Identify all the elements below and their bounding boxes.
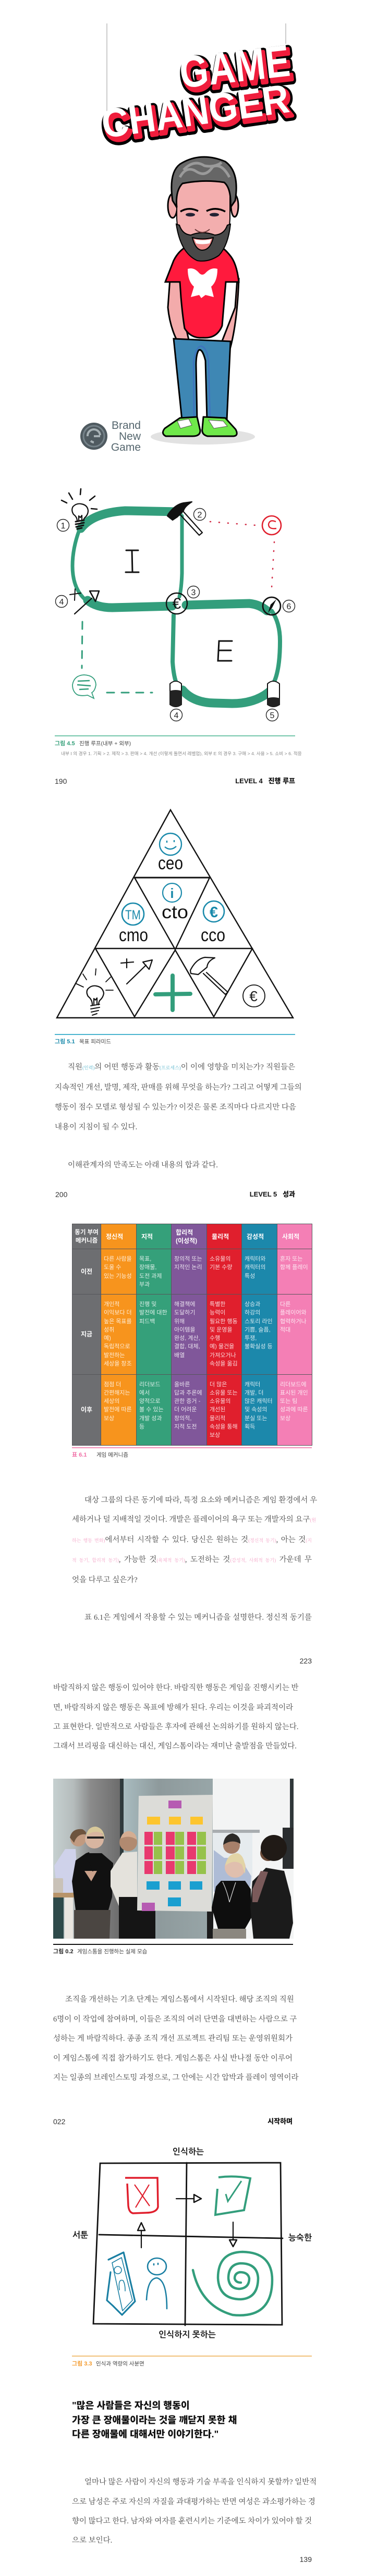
face <box>177 180 230 260</box>
table row: after: 세상의 <box>104 1398 119 1404</box>
table row: after: 관한 증거 - <box>174 1398 200 1404</box>
logo: brand new game <box>80 420 141 453</box>
table row: now: 다른 <box>280 1301 290 1308</box>
green spiral <box>193 2252 272 2315</box>
cmo block <box>119 903 148 945</box>
paragraph: undesired behaviour: 바람직하지 않은 행동이 있어야 한다. 바람직한 행동은 게임을 진행시키는 반 <box>53 1684 298 1692</box>
step numbers: 6 <box>287 602 291 611</box>
blue figure and mirror <box>107 2252 167 2315</box>
character illustration <box>151 156 255 445</box>
page number 190: 190 <box>55 777 67 785</box>
pull quote <box>72 2400 237 2439</box>
caption: table 6.1: 표 6.1 <box>72 1452 87 1458</box>
table header row: 지적 <box>141 1233 153 1240</box>
table row: now: 예) <box>104 1335 111 1341</box>
icon: logo sphere <box>80 423 107 450</box>
table row: before: 혼자 또는 <box>280 1256 303 1262</box>
table row: now: 협력하거나 <box>280 1318 307 1325</box>
icon: euro coin <box>166 593 187 614</box>
icon: green plus <box>155 976 190 1010</box>
woman with dark curly hair <box>250 1835 293 1939</box>
table row: before <box>72 1249 312 1294</box>
purple bottom note <box>142 1903 155 1911</box>
paragraph: gamestorm <box>53 1995 298 2082</box>
table row: after: 보상 <box>104 1415 114 1422</box>
page number 139: 139 <box>300 2555 312 2563</box>
caption note: 내부 I 의 경우 1. 기획 > 2. 제작 > 3. 판매 > 4. 개선 (이렇게 돌면서 레벨업), 외부 E 의 경우 3. 구매 > 4. 사용 > 5. 소비 > 6. 적응 <box>61 751 302 756</box>
table row: now: 높은 목표를 <box>104 1318 132 1325</box>
caption: figure 4.5: 진행 루프(내부 + 외부) <box>79 741 131 747</box>
table row: after: 등 <box>139 1424 144 1430</box>
poster board <box>137 1795 213 1912</box>
table row: before: 장애물, <box>139 1264 156 1271</box>
table row: after: 볼 수 있는 <box>139 1407 164 1413</box>
table row: after: 또는 팀 <box>280 1398 297 1404</box>
table row: now: 필요한 행동 <box>210 1318 238 1325</box>
table row: after: 양적으로 <box>139 1398 160 1404</box>
green checkbox with tick <box>215 2176 250 2215</box>
caption rule <box>53 1944 293 1945</box>
table row: after: 분실 또는 <box>245 1415 267 1422</box>
caption: figure 3.3 <box>72 2361 144 2367</box>
cto block <box>162 883 188 922</box>
paragraph: gamestorm: 성하는 게 바람직하다. 종종 조직 개선 프로젝트 관리팀 또는 운영위원회가 <box>53 2035 293 2043</box>
table row: now: 위해 <box>174 1318 185 1325</box>
cco block: cco <box>201 925 225 945</box>
table row: before: 도전 과제 <box>139 1273 162 1279</box>
icon: light bulb <box>62 489 97 529</box>
table row: now: 특별한 <box>210 1301 225 1308</box>
cto block: cto <box>162 902 188 922</box>
label: clumsy: 서툰 <box>72 2232 88 2239</box>
table row: before: 있는 기능성 <box>104 1273 132 1279</box>
icon: hammer <box>190 957 228 994</box>
paragraph: stakeholders: 이해관계자의 만족도는 아래 내용의 합과 같다. <box>68 1161 218 1169</box>
table row: after: 및 속성의 <box>245 1407 267 1413</box>
step numbers: 4 <box>59 598 64 607</box>
icon: compass <box>263 597 281 615</box>
paragraph: how many people <box>72 2478 317 2545</box>
label: unaware: 인식하지 못하는 <box>159 2331 216 2339</box>
cco block: € <box>210 904 218 921</box>
bald man in white shirt <box>111 1831 155 1939</box>
caption: figure 4.5 <box>55 740 131 747</box>
table row: now: 기쁨, 슬픔, <box>245 1327 271 1333</box>
caption: figure 4.5: 그림 4.5 <box>55 741 75 747</box>
paragraph: target groups: 적 동기, 합리적 동기), 가능한 것(육체적 동기), 도전하는 것(감성적, 사회적 동기) 가운데 무 <box>72 1556 312 1564</box>
paragraph: how many people: 으로 보인다. <box>72 2536 112 2545</box>
table row: now: 아이템을 <box>174 1327 195 1333</box>
table row: after: 보상 <box>280 1415 290 1422</box>
step numbers: 4 <box>174 711 179 720</box>
logo wordmark: Brand <box>112 420 141 432</box>
pink notes <box>144 1832 196 1874</box>
paragraph: undesired behaviour <box>53 1683 298 1751</box>
table row: now: 플레이어와 <box>280 1310 307 1316</box>
table row: now: 발전에 대한 <box>139 1310 167 1316</box>
pull quote: 가장 큰 장애물이라는 것을 깨닫지 못한 채 <box>72 2414 237 2425</box>
table row: now: 예) 물건을 <box>210 1344 234 1350</box>
arms <box>168 279 239 349</box>
table row: now: 독립적으로 <box>104 1344 130 1350</box>
paragraph: employees: 행동이 점수 모델로 형성될 수 있는가? 이것은 물론 조직마다 다르지만 다음 <box>55 1103 296 1112</box>
table row: now: 가져오거나 <box>210 1352 236 1359</box>
table row: after: 발전에 따른 <box>104 1407 132 1413</box>
table row: after: 개발 성과 <box>139 1415 162 1422</box>
eyes, brows and nose <box>180 209 225 232</box>
grid <box>93 2163 283 2325</box>
paragraph: target groups: 대상 그룹의 다른 동기에 따라, 특정 요소와 메커니즘은 게임 환경에서 우 <box>84 1496 317 1505</box>
diagram: awareness and competence quadrant <box>93 2162 284 2326</box>
table row: after: 많은 캐릭터 <box>245 1398 273 1404</box>
table row: before: 특성 <box>245 1273 255 1279</box>
logo wordmark <box>111 420 141 453</box>
table row: after: 창의적, <box>174 1415 191 1422</box>
paragraph: employees <box>55 1063 302 1131</box>
table row: now: 스토리 라인 <box>245 1318 273 1325</box>
dashed link green <box>82 622 152 693</box>
table row: after: 캐릭터 <box>245 1381 260 1387</box>
table row: now: 능력이 <box>210 1310 225 1316</box>
beard and mouth <box>176 224 230 261</box>
table row: before: 함께 플레이 <box>280 1264 308 1271</box>
pyramid outline <box>57 810 293 1018</box>
t-shirt <box>165 246 239 338</box>
caption: figure 3.3: 그림 3.3 <box>72 2361 92 2367</box>
caption rule <box>55 1034 295 1035</box>
table row: now: 해결책에 <box>174 1301 195 1308</box>
ceo block <box>158 833 183 873</box>
icon: speech bubble <box>72 675 96 698</box>
logotype: CHANGER <box>101 79 295 151</box>
paragraph: target groups <box>72 1496 317 1584</box>
table header row: 사회적 <box>282 1233 299 1240</box>
man at the flipchart <box>207 1833 251 1939</box>
caption: figure 5.1 <box>55 1038 111 1045</box>
table row: after: 개선된 <box>210 1407 225 1413</box>
table row: after: 리더보드에 <box>280 1381 307 1387</box>
curtains and window <box>53 1779 294 1939</box>
table row: now: 완성, 계산, <box>174 1335 200 1341</box>
paragraph: how many people: 얼마나 많은 사람이 자신의 행동과 기술 부족을 인식하지 못할까? 일반적 <box>84 2478 317 2486</box>
table row: after: 소유물 또는 <box>210 1390 238 1396</box>
arrow: right <box>176 2195 201 2202</box>
table header row: 메커니즘 <box>76 1237 98 1243</box>
yellow notes <box>147 1817 203 1825</box>
table row: after: 리더보드 <box>139 1381 160 1387</box>
letter E <box>218 641 232 661</box>
shirt logo <box>188 268 217 298</box>
table row: after: 더 많은 <box>210 1381 227 1387</box>
table header row: 물리적 <box>212 1233 229 1240</box>
table row: now: 진행 및 <box>139 1301 156 1308</box>
caption: table 6.1 <box>72 1452 128 1458</box>
table row: now: 세상을 창조 <box>104 1361 132 1367</box>
step numbers: 2 <box>198 511 202 520</box>
table header row: 감성적 <box>247 1233 264 1240</box>
icon: hammer <box>167 502 202 535</box>
caption rule <box>55 735 295 736</box>
table row: now: 적대 <box>280 1327 290 1333</box>
paragraph: target groups: 하는 행동 변화)에서부터 시작할 수 있다. 당신은 원하는 것(정신적 동기), 아는 것(지 <box>72 1536 312 1544</box>
cmo block: TM <box>125 908 141 922</box>
step numbers: 3 <box>191 588 196 597</box>
table row: before: 캐릭터와 <box>245 1256 265 1262</box>
page number 200: 200 <box>55 1190 67 1199</box>
hair <box>172 157 236 207</box>
table header row: 정신적 <box>106 1233 123 1240</box>
table row: now: 불확실성 등 <box>245 1344 273 1350</box>
ground shadow <box>151 429 255 445</box>
table header row: 합리적 <box>176 1229 193 1236</box>
caption: figure 0.2: 게임스톰을 진행하는 실제 모습 <box>77 1949 147 1955</box>
table row: before: 소유물의 <box>210 1256 230 1262</box>
table row: after: 이후 <box>81 1406 92 1413</box>
logotype <box>99 35 295 151</box>
heading: aware: 인식하는 <box>173 2148 204 2156</box>
table row: now <box>72 1295 312 1374</box>
paragraph: gamestorm: 이 게임스톰에 직접 참가하기도 한다. 게임스톰은 사실 반나절 동안 이루어 <box>53 2054 293 2063</box>
table row: after: 성과에 따른 <box>280 1407 308 1413</box>
paragraph: target groups: 엇을 다루고 싶은가? <box>72 1576 138 1584</box>
table row: now: 배열 <box>174 1352 185 1359</box>
logo wordmark: New <box>119 430 141 442</box>
table row: now: 및 운영을 <box>210 1327 233 1333</box>
paragraph: undesired behaviour: 그래서 브리핑을 대신하는 대신, 게임스톰이라는 재미난 출발점을 만들었다. <box>53 1742 297 1751</box>
table row: before: 다른 사람을 <box>104 1256 132 1262</box>
logotype: GAME <box>177 35 293 98</box>
letter I <box>126 550 139 572</box>
table row: now: 지금 <box>81 1330 92 1338</box>
table row: before: 이전 <box>81 1268 92 1275</box>
table row: now: 피드백 <box>139 1318 155 1325</box>
logotype: CHANGER <box>99 75 292 147</box>
icon: red C <box>262 516 281 535</box>
table row: now: 결합, 대체, <box>174 1344 200 1350</box>
cco block <box>201 901 225 945</box>
shoes <box>163 417 237 436</box>
blue notes <box>147 1881 202 1906</box>
icon: euro coin: € <box>173 595 181 612</box>
caption: figure 5.1: 그림 5.1 <box>55 1039 75 1045</box>
step numbers: 5 <box>270 711 275 720</box>
table row: after: 소유물의 <box>210 1398 230 1404</box>
table row: after: 에서 <box>139 1390 150 1396</box>
table row: after: 간편해지는 <box>104 1390 130 1396</box>
table row: before: 창의적 또는 <box>174 1256 202 1262</box>
photo: gamestorm session <box>53 1779 294 1939</box>
paragraph: how many people: 으로 남성은 주로 자신의 자질을 과대평가하는 반면 여성은 과소평가하는 경 <box>72 2498 315 2506</box>
paragraph: gamestorm: 6명이 이 작업에 참여하며, 이들은 조직의 여러 단면을 대변하는 사람으로 구 <box>53 2015 297 2024</box>
label: proficient: 능숙한 <box>288 2234 312 2242</box>
dotted link red <box>210 522 274 588</box>
red checkbox with cross <box>125 2178 158 2213</box>
cmo block: cmo <box>119 925 148 945</box>
table header row: (이성적) <box>176 1237 197 1244</box>
table row: now: 수행 <box>210 1335 220 1341</box>
step numbers: 1 <box>61 522 66 531</box>
table row: after: 보상 <box>210 1432 220 1438</box>
paragraph: target groups: 세하거나 덜 지배적일 것이다. 개발은 플레이어의 욕구 또는 개발자의 요구(원 <box>72 1515 316 1524</box>
table row: after: 지적 도전 <box>174 1424 197 1430</box>
table row: before: 목표, <box>139 1256 151 1262</box>
table row: after: 물리적 <box>210 1415 225 1422</box>
icon: low jar <box>267 681 280 707</box>
table row: now: 이익보다 더 <box>104 1310 132 1316</box>
pull quote: "많은 사람들은 자신의 행동이 <box>72 2400 190 2411</box>
logotype: CHANGER <box>101 79 295 151</box>
caption: figure 3.3: 인식과 역량의 사분면 <box>96 2361 144 2367</box>
caption: table 6.1: 게임 메커니즘 <box>96 1452 128 1458</box>
table row: before: 지적인 논리 <box>174 1264 202 1271</box>
paragraph: how many people: 향이 많다고 한다. 남자와 여자를 훈련시키는 기준에도 차이가 있어야 할 것 <box>72 2517 312 2525</box>
table row: after: 속성을 통해 <box>210 1424 238 1430</box>
table row: after: 답과 추론에 <box>174 1390 202 1396</box>
paragraph: table note: 표 6.1은 게임에서 작용할 수 있는 메커니즘을 설명한다. 정신적 동기를 <box>84 1613 312 1622</box>
purple top note <box>168 1801 181 1808</box>
table row: before: 도울 수 <box>104 1264 121 1271</box>
table row: after: 개발, 더 <box>245 1390 263 1396</box>
table: motivation mechanisms <box>72 1224 312 1446</box>
running head: introduction: 시작하며 <box>267 2117 293 2125</box>
ears <box>168 194 238 218</box>
paragraph: employees: 내용이 지침이 될 수 있다. <box>55 1123 137 1131</box>
table row: now: 발전하는 <box>104 1352 125 1359</box>
paragraph: employees: 직원(인력)의 어떤 행동과 활동(프로세스)이 이에 영향을 미치는가? 직원들은 <box>68 1063 295 1071</box>
cto block: i <box>170 885 174 901</box>
page number 022: 022 <box>53 2117 65 2126</box>
table row: now: 속성을 옮김 <box>210 1361 238 1367</box>
table row: after: 올바른 <box>174 1381 190 1387</box>
external loop E <box>173 603 280 704</box>
table row: before: 기본 수량 <box>210 1264 233 1271</box>
man in lavender shirt <box>54 1829 86 1894</box>
icon: arrow with plus <box>121 959 152 984</box>
paragraph: gamestorm: 지는 일종의 브레인스토밍 과정으로, 그 안에는 시간 압박과 플레이 영역이라 <box>53 2074 298 2082</box>
page number 223: 223 <box>300 1657 312 1665</box>
paragraph: gamestorm: 조직을 개선하는 기초 단계는 게임스톰에서 시작된다. 해당 조직의 직원 <box>65 1995 294 2004</box>
logotype: GAME <box>179 40 295 102</box>
logo wordmark: Game <box>111 441 141 453</box>
icon: euro coin <box>243 985 265 1007</box>
woman with microphone <box>72 1827 113 1939</box>
arrow: down <box>229 2222 237 2247</box>
arrow: up <box>138 2223 145 2248</box>
caption: figure 5.1: 목표 피라미드 <box>79 1039 111 1045</box>
table header row: 동기 부여 <box>75 1229 99 1235</box>
title: game changer sign <box>99 23 297 151</box>
woman in black top <box>212 1853 251 1939</box>
icon: euro coin: € <box>249 988 258 1004</box>
step numbers <box>55 509 295 721</box>
table row: before: 캐릭터의 <box>245 1264 265 1271</box>
running head: level 4: LEVEL 4 진행 루프 <box>235 777 295 785</box>
icon: light bulb <box>76 969 113 1015</box>
caption rule <box>72 2356 312 2357</box>
table row: now: 성취 <box>104 1327 114 1333</box>
table row: now: 하강의 <box>245 1310 260 1316</box>
table row: now: 개인적 <box>104 1301 119 1308</box>
laptop and desk <box>53 1878 77 1939</box>
diagram: progress loop <box>55 488 295 721</box>
green notes <box>154 1832 206 1874</box>
hanging strings <box>107 23 286 116</box>
caption rule <box>72 1447 312 1448</box>
table row: after: 획득 <box>245 1424 255 1430</box>
ceo block: ceo <box>158 853 183 873</box>
icon: arrow up with plus <box>70 589 99 614</box>
table row: before: 부과 <box>139 1281 150 1288</box>
internal loop I <box>72 511 182 608</box>
pull quote: 다른 장애물에 대해서만 이야기한다." <box>72 2429 218 2439</box>
paragraph: undesired behaviour: 면, 바람직하지 않은 행동은 목표에 방해가 된다. 우리는 이것을 파괴적이라 <box>53 1704 293 1712</box>
flipchart <box>213 1830 260 1888</box>
paragraph: undesired behaviour: 고 표현한다. 일반적으로 사람들은 후자에 관해선 논의하기를 원하지 않는다. <box>53 1723 298 1731</box>
table row: after <box>72 1375 312 1445</box>
table row: now: 도달하기 <box>174 1310 195 1316</box>
table row: after: 점점 더 <box>104 1381 121 1387</box>
caption: figure 0.2: 그림 0.2 <box>53 1949 74 1955</box>
icon: full jar <box>169 681 182 707</box>
table header row <box>72 1224 312 1445</box>
table row: after: 더 어려운 <box>174 1407 197 1413</box>
jeans <box>174 339 230 420</box>
paragraph: employees: 지속적인 개선, 발명, 제작, 판매를 위해 무엇을 하는가? 그리고 어떻게 그들의 <box>55 1083 302 1092</box>
diagram: goal pyramid <box>56 809 294 1018</box>
logotype: GAME <box>179 39 295 102</box>
running head: level 5: LEVEL 5 성과 <box>250 1190 295 1198</box>
table row: now: 투쟁, <box>245 1335 257 1341</box>
table row: after: 표시된 개인 <box>280 1390 308 1396</box>
table row: now: 상승과 <box>245 1301 260 1308</box>
